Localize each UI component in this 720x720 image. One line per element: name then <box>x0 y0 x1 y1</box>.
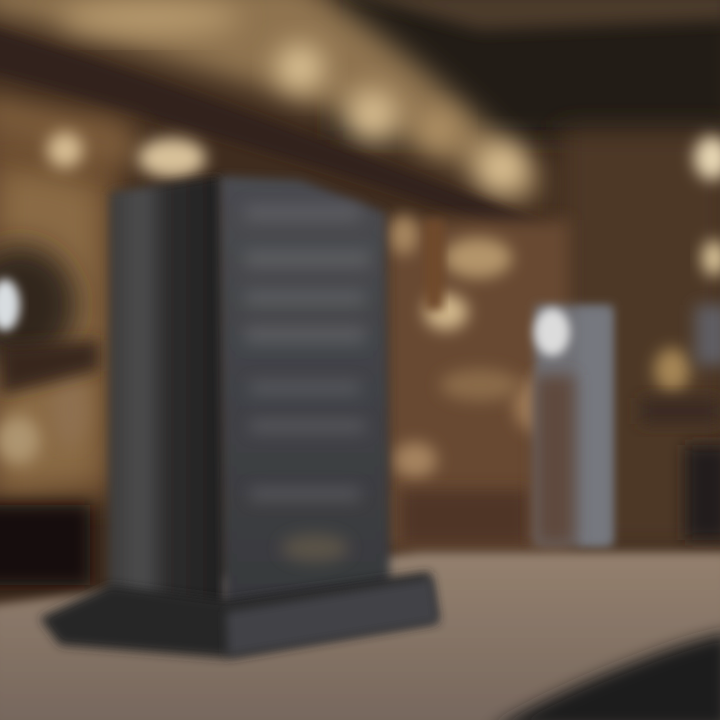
tablet base front <box>226 578 438 656</box>
shelves behind tablet <box>385 215 570 550</box>
tablet base <box>40 572 438 658</box>
tablet: stone slab <box>40 176 438 658</box>
table surface <box>0 552 720 720</box>
bright doorway <box>534 305 613 545</box>
right wall lights and shelf <box>640 136 720 540</box>
tablet front face <box>220 176 390 612</box>
tablet inscription lines <box>245 205 370 500</box>
left wall with lights <box>0 90 206 585</box>
foreground dark object <box>490 632 720 720</box>
tablet warm smudge <box>281 534 349 562</box>
ceiling band: warm lit curve <box>0 0 720 205</box>
dark ceiling beam <box>0 25 560 246</box>
tablet side face <box>108 176 226 612</box>
